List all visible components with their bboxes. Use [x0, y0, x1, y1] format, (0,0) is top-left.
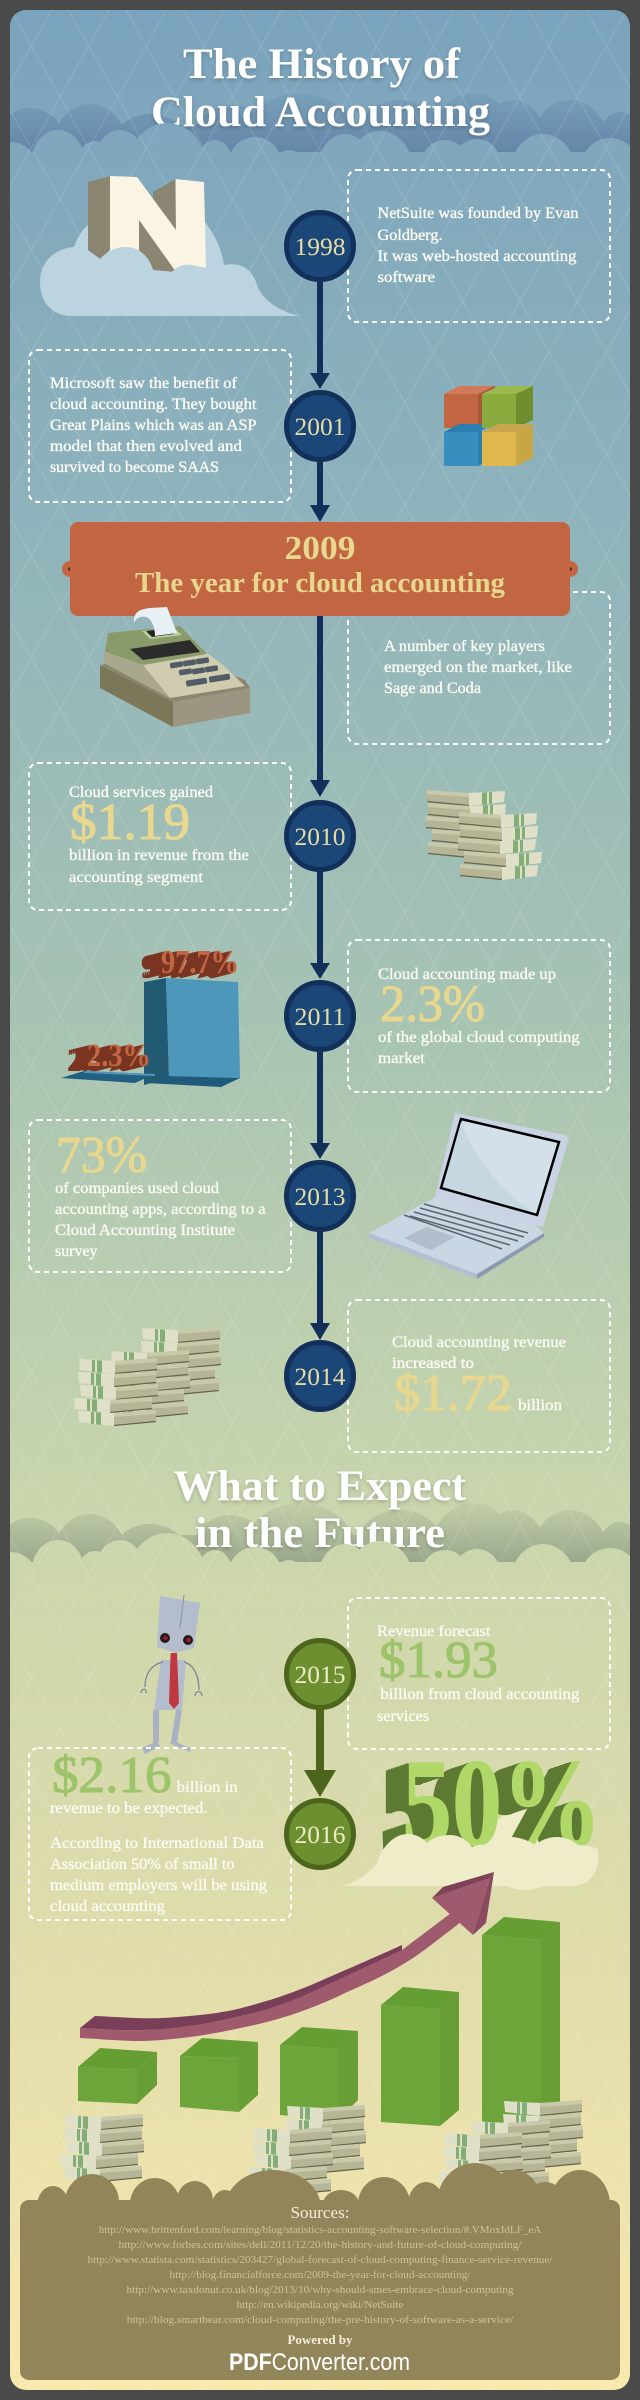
chart: 97.7% vs 2.3% bars: 2.3%	[87, 1038, 151, 1074]
box: 1998: software	[378, 269, 435, 286]
year 2013: 2013	[294, 1184, 346, 1211]
box: 2009 detail: A number of key players	[384, 638, 545, 655]
chart: 97.7% vs 2.3% bars: 97.7%	[161, 944, 239, 981]
box: 2009 detail: emerged on the market, like	[384, 659, 572, 676]
box: 2013: survey	[55, 1243, 98, 1260]
panel: sources footer	[20, 2163, 620, 2380]
year 2016: 2016	[294, 1822, 346, 1849]
box: 2010	[29, 763, 291, 910]
box: 2016: $2.16	[52, 1747, 172, 1804]
box: 2009 detail: Sage and Coda	[384, 680, 481, 697]
box: 2010: Cloud services gained	[69, 784, 213, 801]
box: 2001: survived to become SAAS	[50, 459, 219, 476]
icon: NetSuite N on cloud	[40, 176, 300, 316]
box: 1998	[348, 170, 610, 322]
chart: growth bars	[78, 1917, 560, 2130]
icon: money pile 2010	[426, 790, 542, 880]
panel: sources footer: http://www.taxdonut.co.uk/blog/2013/10/why-should-smes-embrace-cloud-computing	[126, 2285, 514, 2296]
year 2015: 2015	[294, 1662, 346, 1689]
box: 2011: market	[378, 1050, 426, 1067]
box: 2014: billion	[518, 1397, 562, 1414]
banner: 2009	[62, 522, 578, 616]
box: 2016: medium employers will be using	[50, 1877, 267, 1894]
year 1998	[286, 212, 354, 280]
box: 2015: Revenue forecast	[377, 1623, 491, 1640]
banner: 2009: 2009	[284, 530, 356, 567]
box: 2001: Great Plains which was an ASP	[50, 417, 256, 434]
year 2013	[286, 1162, 354, 1230]
year 1998: 1998	[294, 234, 346, 261]
box: 2016: cloud accounting	[50, 1898, 165, 1915]
box: 2015: billion from cloud accounting	[380, 1686, 580, 1703]
year 2016	[286, 1800, 354, 1868]
year 2011: 2011	[294, 1004, 346, 1031]
box: 2011: 2.3%	[380, 976, 485, 1033]
title	[151, 41, 490, 136]
year 2011	[286, 982, 354, 1050]
box: 2014	[348, 1300, 610, 1452]
panel: sources footer: http://www.brittenford.com/learning/blog/statistics-accounting-software-selection/#.VMoxIdLF_eA	[99, 2225, 542, 2236]
icon: Microsoft cubes	[444, 386, 533, 466]
box: 2013: accounting apps, according to a	[55, 1201, 266, 1218]
year 2014	[286, 1342, 354, 1410]
timeline lines and arrows	[310, 280, 330, 1340]
box: 1998: Goldberg.	[378, 227, 442, 244]
icon: money pile 2014	[74, 1327, 221, 1426]
box: 2010: billion in revenue from the	[69, 847, 249, 864]
panel: sources footer: Sources:	[290, 2203, 350, 2222]
year 2001: 2001	[294, 414, 346, 441]
box: 2013: of companies used cloud	[55, 1180, 219, 1197]
icon: 50% on cloud	[341, 1735, 602, 1890]
box: 2016	[29, 1747, 291, 1920]
box: 2016: Association 50% of small to	[50, 1856, 235, 1873]
box: 2013: 73%	[56, 1127, 147, 1184]
box: 1998: NetSuite was founded by Evan	[378, 205, 579, 222]
box: 2014: $1.72	[394, 1365, 512, 1422]
illustration: robot	[141, 1595, 202, 1754]
panel: sources footer: http://www.statista.com/statistics/203427/global-forecast-of-cloud-computing-finance-service-revenue/	[88, 2255, 553, 2266]
box: 2015: services	[377, 1708, 429, 1725]
box: 2015: $1.93	[379, 1632, 498, 1689]
box: 2014: increased to	[392, 1355, 474, 1372]
title: The History of	[183, 41, 461, 88]
box: 2010: accounting segment	[69, 869, 204, 886]
panel: sources footer: http://www.forbes.com/sites/dell/2011/12/20/the-history-and-future-of-cloud-computing/	[118, 2240, 522, 2251]
box: 2014: Cloud accounting revenue	[392, 1334, 566, 1351]
box: 2001: Microsoft saw the benefit of	[50, 375, 238, 392]
icon: money piles bottom	[60, 2100, 583, 2200]
box: 2001	[29, 350, 291, 502]
panel: sources footer: PDFConverter.com	[229, 2349, 410, 2376]
box: 2010: $1.19	[70, 794, 190, 851]
box: 2016: According to International Data	[50, 1835, 264, 1852]
box: 2013: Cloud Accounting Institute	[55, 1222, 235, 1239]
heading: future: What to Expect	[174, 1463, 467, 1510]
year 2010	[286, 802, 354, 870]
box: 2001: cloud accounting. They bought	[50, 396, 257, 413]
year 2015	[286, 1640, 354, 1708]
arrow: 2015 to 2016	[304, 1705, 336, 1797]
box: 1998: It was web-hosted accounting	[378, 248, 577, 265]
chart: 97.7% vs 2.3% bars	[61, 944, 240, 1087]
box: 2016: billion in	[177, 1779, 238, 1796]
box: 2011	[348, 940, 610, 1092]
heading: future	[174, 1470, 466, 1551]
heading: future: in the Future	[195, 1510, 445, 1557]
box: 2009 detail	[348, 592, 610, 744]
box: 2001: model that then evolved and	[50, 438, 242, 455]
panel: sources footer: Powered by	[288, 2332, 353, 2347]
icon: calculator	[100, 607, 250, 727]
year 2010: 2010	[294, 824, 346, 851]
arrow: growth	[80, 1872, 494, 2041]
panel: sources footer: http://en.wikipedia.org/wiki/NetSuite	[236, 2300, 404, 2311]
box: 2011: of the global cloud computing	[378, 1029, 580, 1046]
box: 2016: revenue to be expected.	[50, 1800, 208, 1817]
box: 2015	[348, 1598, 610, 1749]
title: Cloud Accounting	[151, 89, 490, 136]
box: 2011: Cloud accounting made up	[378, 966, 556, 983]
box: 2013	[29, 1120, 291, 1272]
banner: 2009: The year for cloud accounting	[135, 568, 505, 599]
year 2014: 2014	[294, 1364, 346, 1391]
year 2001	[286, 392, 354, 460]
panel: sources footer: http://blog.smartbear.com/cloud-computing/the-pre-history-of-software-as-a-service/	[127, 2315, 513, 2326]
panel: sources footer: http://blog.financialforce.com/2009-the-year-for-cloud-accounting/	[170, 2270, 471, 2281]
icon: laptop	[369, 1113, 569, 1279]
